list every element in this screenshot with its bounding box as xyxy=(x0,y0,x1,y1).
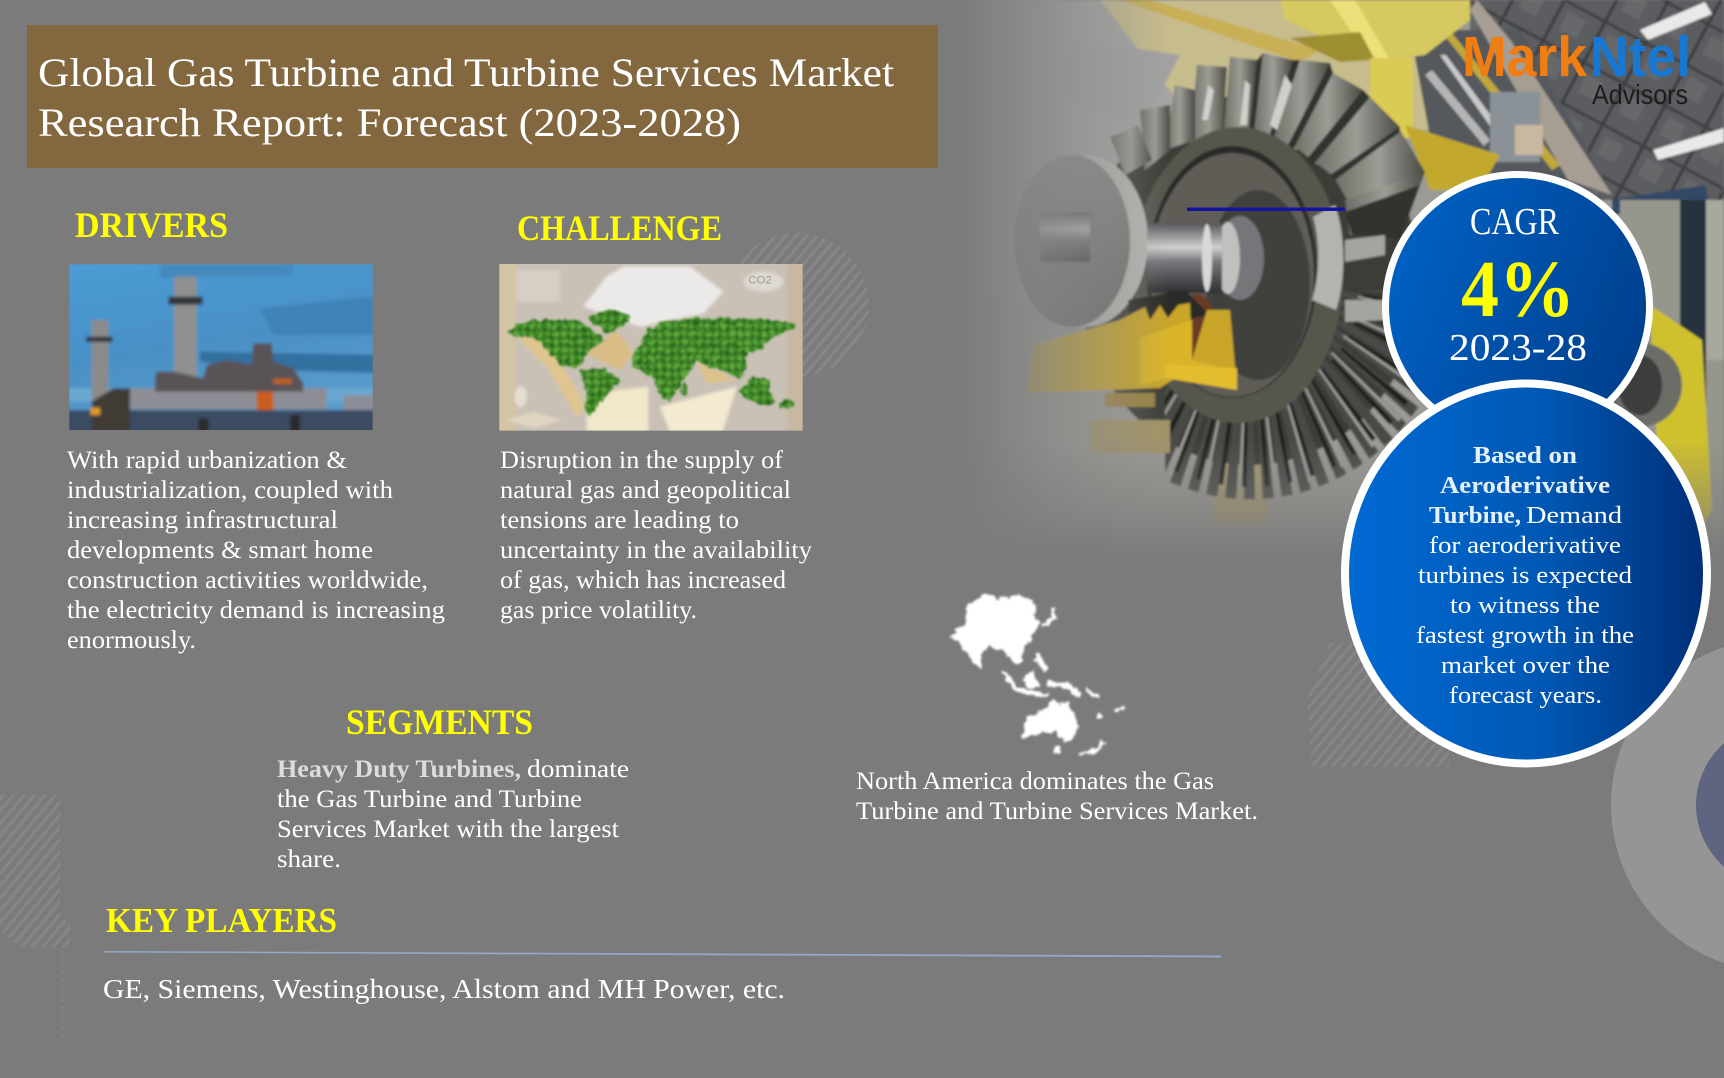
heading: key players: KEY PLAYERS xyxy=(106,901,337,940)
heading: segments: SEGMENTS xyxy=(346,702,533,742)
callout: aeroderivative bubble: for aeroderivative xyxy=(1429,533,1621,559)
callout: aeroderivative bubble: to witness the xyxy=(1450,593,1600,619)
text: segments description xyxy=(277,756,629,873)
icon: Asia-Pacific map xyxy=(950,593,1123,756)
logo: MarkNtel Advisors xyxy=(1462,25,1691,110)
text: challenge description: tensions are leading to xyxy=(500,507,739,534)
logo: MarkNtel Advisors: Ntel xyxy=(1590,25,1691,89)
heading: challenge: CHALLENGE xyxy=(517,208,722,248)
text: segments description: the Gas Turbine and Turbine xyxy=(277,786,582,813)
decorative dotted trace xyxy=(61,950,63,1040)
title banner xyxy=(27,25,938,168)
text: drivers description: construction activities worldwide, xyxy=(67,567,428,594)
callout: CAGR circle xyxy=(1386,174,1650,438)
callout: aeroderivative bubble: fastest growth in the xyxy=(1416,623,1634,649)
text: region description: Turbine and Turbine Services Market. xyxy=(856,798,1258,825)
decorative ring bottom right xyxy=(1611,638,1724,972)
decorative hatched shape left xyxy=(0,795,70,947)
callout: aeroderivative bubble: Aeroderivative xyxy=(1440,473,1610,499)
callout: aeroderivative bubble: forecast years. xyxy=(1449,683,1602,709)
heading: drivers: DRIVERS xyxy=(75,205,228,245)
decorative hatched circle behind challenge image xyxy=(725,233,869,377)
text: drivers description: increasing infrastructural xyxy=(67,507,338,534)
text: segments description: Heavy Duty Turbines, xyxy=(277,756,521,783)
text: drivers description: industrialization, coupled with xyxy=(67,477,394,504)
turbine body dark base xyxy=(1080,95,1420,465)
text: challenge description: Disruption in the supply of xyxy=(500,447,784,474)
text: region description xyxy=(856,768,1258,825)
photo: gas turbine rotor in factory xyxy=(994,0,1724,530)
logo: MarkNtel Advisors: Advisors xyxy=(1592,79,1688,110)
title banner: Global Gas Turbine and Turbine Services Market xyxy=(38,50,894,95)
text: key players list: GE, Siemens, Westinghouse, Alstom and MH Power, etc. xyxy=(103,974,785,1004)
logo: MarkNtel Advisors: Mark xyxy=(1462,25,1587,89)
callout: aeroderivative bubble: market over the xyxy=(1441,653,1610,679)
text: drivers description: the electricity demand is increasing xyxy=(67,597,446,624)
text: region description: North America dominates the Gas xyxy=(856,768,1214,795)
image: green world map on recycled paper xyxy=(499,264,803,431)
decorative hatched shape near bubble xyxy=(1307,643,1449,767)
callout: aeroderivative bubble: Turbine, xyxy=(1429,503,1521,529)
text: challenge description: natural gas and geopolitical xyxy=(500,477,791,504)
text: challenge description: gas price volatility. xyxy=(500,597,697,624)
callout: aeroderivative bubble: Demand xyxy=(1526,503,1622,529)
callout: CAGR circle: 4% xyxy=(1461,246,1575,334)
callout: aeroderivative bubble: Based on xyxy=(1473,443,1577,469)
text: challenge description: uncertainty in the availability xyxy=(500,537,813,564)
callout: aeroderivative bubble: turbines is expected xyxy=(1418,563,1632,589)
image: green world map on recycled paper: CO2 xyxy=(748,274,772,286)
blue line on rotor xyxy=(1187,208,1345,211)
text: segments description: Services Market with the largest xyxy=(277,816,619,843)
text: drivers description xyxy=(67,447,446,654)
callout: CAGR circle: 2023-28 xyxy=(1449,327,1587,369)
image: gas power plant at dusk xyxy=(69,264,373,430)
text: drivers description: enormously. xyxy=(67,627,196,654)
text: drivers description: developments & smart home xyxy=(67,537,373,564)
callout: aeroderivative bubble xyxy=(1345,384,1707,764)
text: drivers description: With rapid urbanization & xyxy=(67,447,347,474)
text: segments description: share. xyxy=(277,846,341,873)
text: challenge description: of gas, which has increased xyxy=(500,567,787,594)
text: segments description: dominate xyxy=(527,756,629,783)
title banner: Research Report: Forecast (2023-2028) xyxy=(38,100,741,145)
text: challenge description xyxy=(500,447,813,624)
divider: key players rule xyxy=(104,951,1221,958)
callout: CAGR circle: CAGR xyxy=(1470,201,1560,243)
